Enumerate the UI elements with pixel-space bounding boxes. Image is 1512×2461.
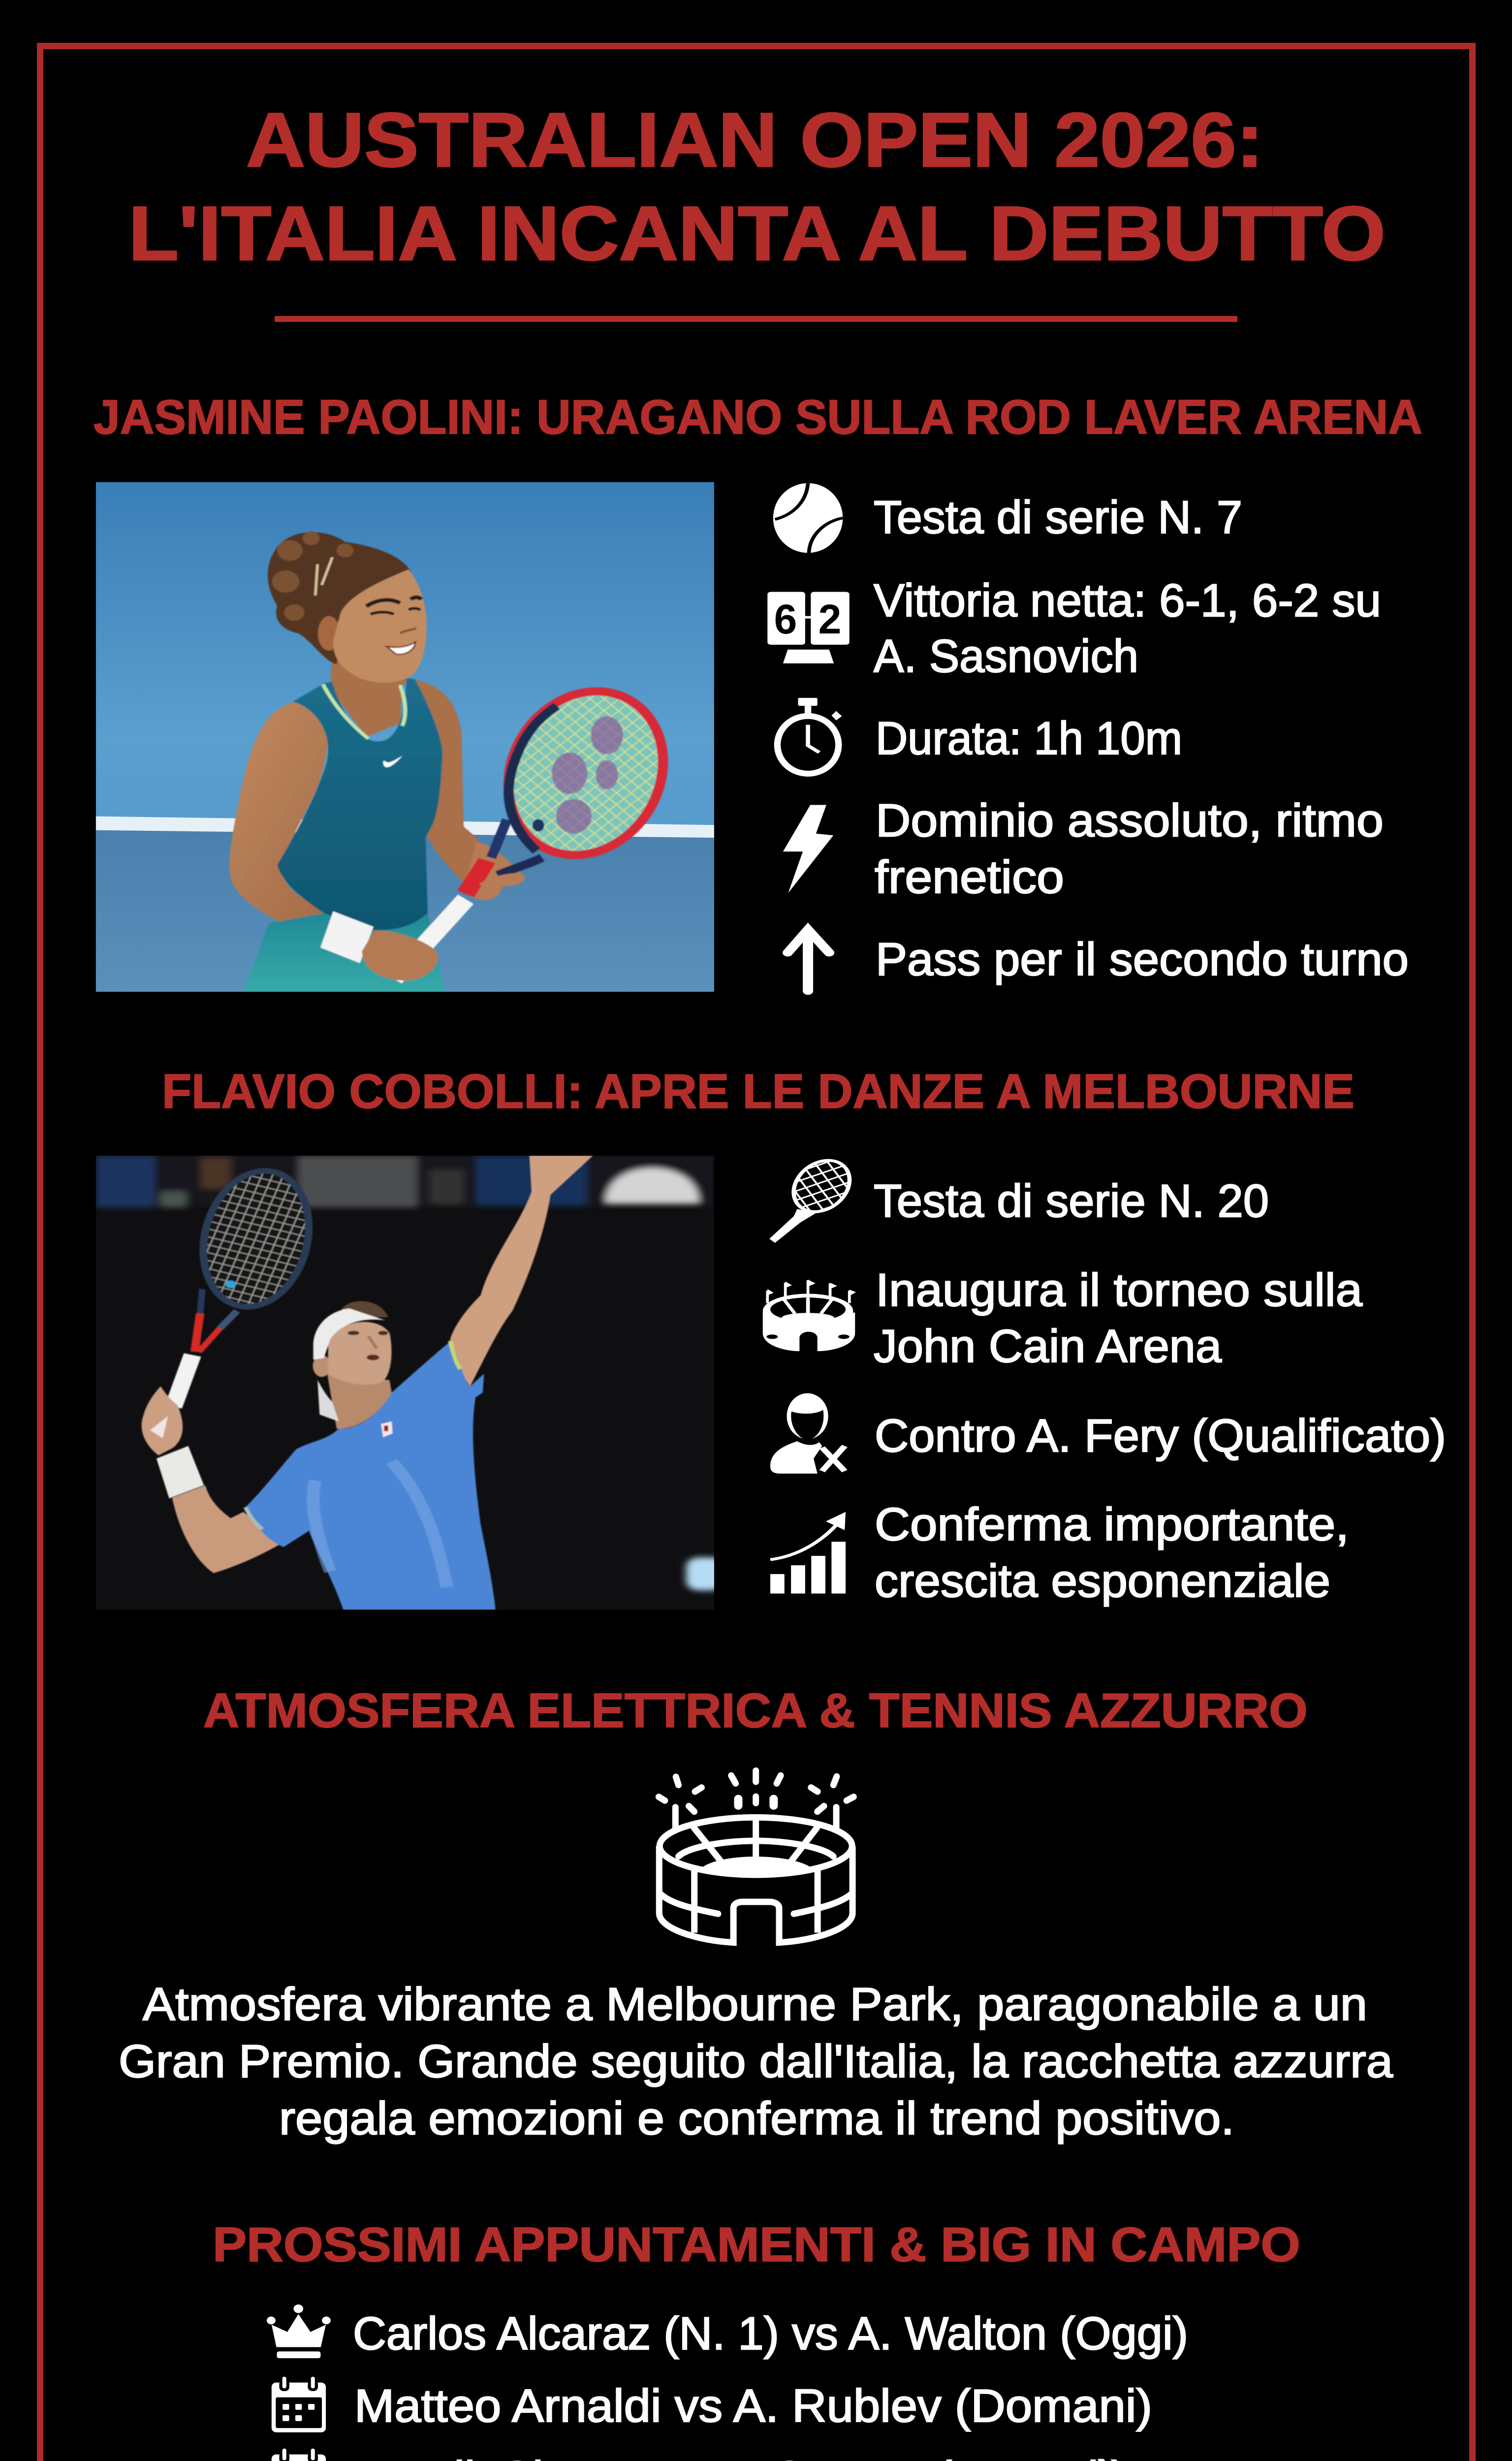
bullet list: Cobolli	[763, 1156, 1446, 1607]
item: confirmation: Conferma importante,	[875, 1498, 1349, 1550]
icon: stadium	[763, 1280, 856, 1351]
item: next round: Pass per il secondo turno	[876, 933, 1409, 985]
icon: racket	[769, 1156, 859, 1243]
item: confirmation: crescita esponenziale	[875, 1555, 1330, 1607]
section heading: Cobolli: FLAVIO COBOLLI: APRE LE DANZE A MELBOURNE	[162, 1064, 1354, 1118]
item: score	[874, 574, 1381, 682]
item: arena: Inaugura il torneo sulla	[876, 1264, 1363, 1316]
icon: crown	[267, 2304, 331, 2358]
icon: tennis ball	[773, 483, 843, 554]
icon: calendar	[272, 2449, 326, 2461]
bullet list: Paolini	[767, 483, 1409, 991]
paragraph: atmosphere text: regala emozioni e conferma il trend positivo.	[279, 2092, 1234, 2144]
item: domination: frenetico	[875, 851, 1064, 903]
photo: Flavio Cobolli	[96, 1156, 724, 1610]
item: score: Vittoria netta: 6-1, 6-2 su	[874, 574, 1381, 626]
item: arena: John Cain Arena	[874, 1320, 1222, 1372]
icon: calendar	[272, 2377, 326, 2432]
title: AUSTRALIAN OPEN 2026:	[246, 97, 1263, 183]
title	[128, 97, 1386, 277]
icon: up arrow	[788, 930, 829, 991]
icon: scoreboard 6-2	[767, 592, 850, 663]
match: Arnaldi: Matteo Arnaldi vs A. Rublev (Domani)	[354, 2380, 1152, 2431]
icon: stopwatch	[774, 698, 842, 777]
title underline	[275, 316, 1237, 322]
icon: opponent with x	[770, 1393, 845, 1474]
paragraph: atmosphere text: Atmosfera vibrante a Melbourne Park, paragonabile a un	[143, 1978, 1367, 2030]
paragraph: atmosphere text	[119, 1978, 1393, 2144]
item: confirmation	[875, 1498, 1349, 1607]
icon: scoreboard 6-2: 6	[774, 596, 797, 642]
match: Alcaraz: Carlos Alcaraz (N. 1) vs A. Walton (Oggi)	[353, 2307, 1188, 2359]
item: domination	[875, 794, 1384, 903]
list: upcoming matches	[267, 2304, 1232, 2461]
title: L'ITALIA INCANTA AL DEBUTTO	[128, 191, 1386, 277]
paragraph: atmosphere text: Gran Premio. Grande seguito dall'Italia, la racchetta azzurra	[119, 2035, 1393, 2087]
icon: stadium with fireworks	[659, 1770, 853, 1943]
item: seed number: Testa di serie N. 20	[874, 1175, 1269, 1227]
section heading: upcoming matches: PROSSIMI APPUNTAMENTI & BIG IN CAMPO	[213, 2217, 1300, 2272]
item: score: A. Sasnovich	[874, 630, 1138, 682]
section heading: atmosphere: ATMOSFERA ELETTRICA & TENNIS AZZURRO	[203, 1683, 1308, 1737]
photo: Jasmine Paolini	[96, 482, 714, 992]
item: duration: Durata: 1h 10m	[876, 712, 1182, 764]
icon: lightning bolt	[783, 805, 833, 893]
item: domination: Dominio assoluto, ritmo	[876, 794, 1384, 846]
item: arena	[874, 1264, 1363, 1372]
icon: scoreboard 6-2: 2	[819, 596, 841, 642]
item: opponent: Contro A. Fery (Qualificato)	[875, 1410, 1446, 1461]
icon: growth chart	[770, 1512, 846, 1594]
item: seed number: Testa di serie N. 7	[874, 491, 1242, 543]
section heading: Paolini: JASMINE PAOLINI: URAGANO SULLA ROD LAVER ARENA	[94, 390, 1422, 444]
